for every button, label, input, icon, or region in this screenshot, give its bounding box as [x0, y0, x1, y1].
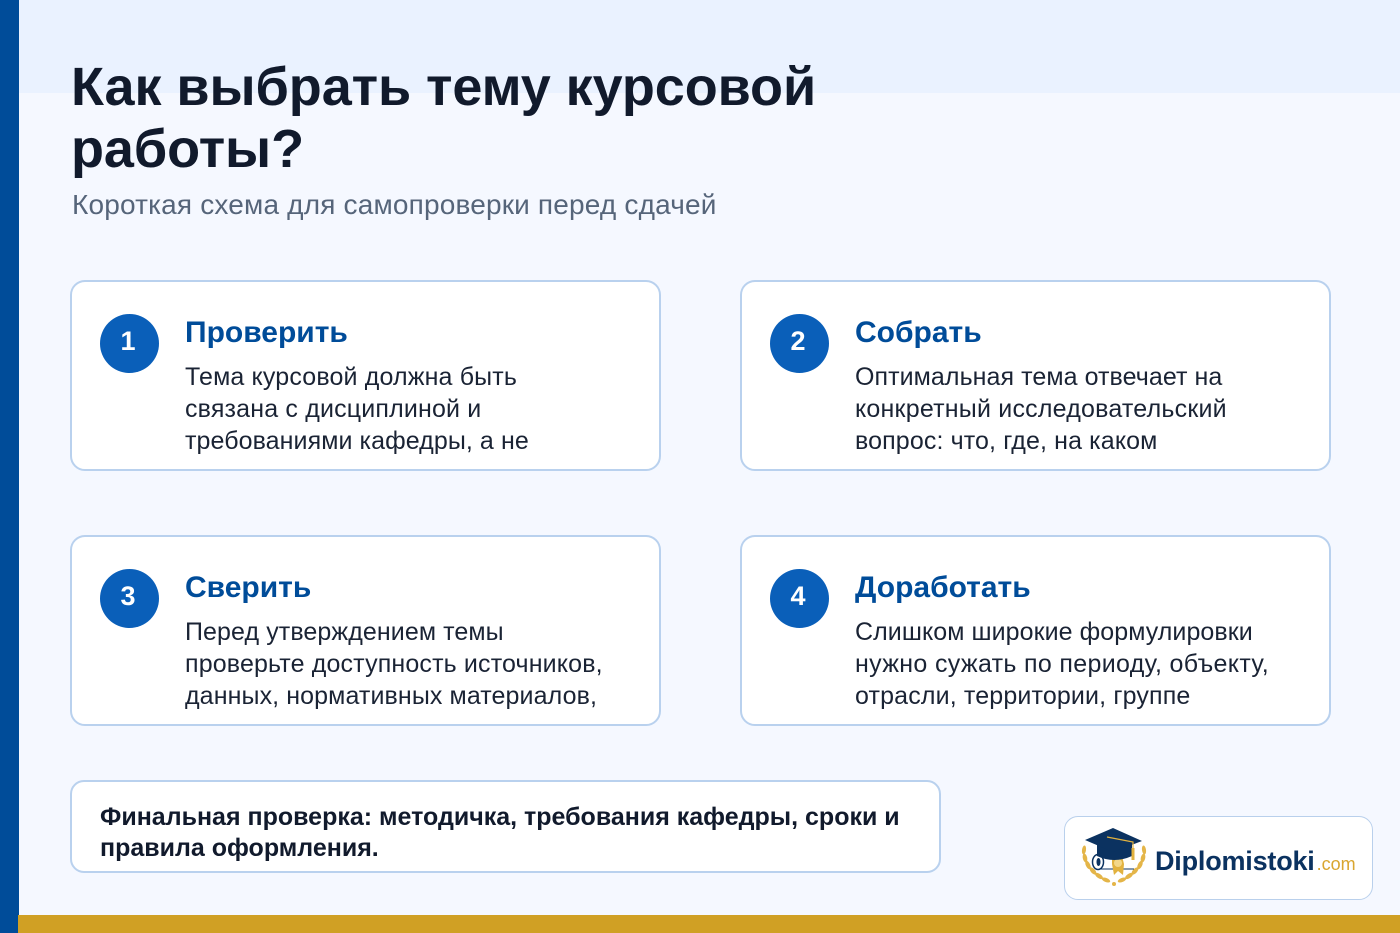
step 1 text: требованиями кафедры, а не [185, 427, 529, 455]
step 1 text: Тема курсовой должна быть [185, 363, 517, 391]
step number 4: 4 [790, 581, 806, 611]
left accent bar [0, 0, 19, 933]
step 2 text: конкретный исследовательский [855, 395, 1227, 423]
header band [19, 0, 1400, 93]
step 3 text [185, 618, 603, 710]
step 2 text [855, 363, 1227, 455]
step number 3: 3 [120, 581, 136, 611]
step number 2: 2 [790, 326, 806, 356]
step number 4 [770, 569, 829, 628]
subtitle: Короткая схема для самопроверки перед сдачей [72, 189, 717, 220]
panel: step 4 [740, 535, 1331, 726]
title: работы? [71, 119, 304, 179]
title [71, 57, 816, 179]
panel: step 3 [70, 535, 661, 726]
step 3 heading: Сверить [185, 571, 311, 604]
callout: final check [70, 780, 941, 873]
step number 1 [100, 314, 159, 373]
step 3 text: проверьте доступность источников, [185, 650, 603, 678]
logo wordmark: Diplomistoki.com [1155, 846, 1356, 876]
step number 3 [100, 569, 159, 628]
step 4 text: отрасли, территории, группе [855, 682, 1190, 710]
step 1 text: связана с дисциплиной и [185, 395, 481, 423]
panel: step 2 [740, 280, 1331, 471]
step 2 text: вопрос: что, где, на каком [855, 427, 1158, 455]
step 1 heading: Проверить [185, 316, 348, 349]
step 3 text: данных, нормативных материалов, [185, 682, 597, 710]
step 3 text: Перед утверждением темы [185, 618, 504, 646]
step 4 text: нужно сужать по периоду, объекту, [855, 650, 1269, 678]
step number 2 [770, 314, 829, 373]
step 4 text: Слишком широкие формулировки [855, 618, 1253, 646]
panel: step 1 [70, 280, 661, 471]
step number 1: 1 [120, 326, 136, 356]
step 2 text: Оптимальная тема отвечает на [855, 363, 1222, 391]
step 4 text [855, 618, 1269, 710]
step 4 heading: Доработать [855, 571, 1031, 604]
callout: final check: правила оформления. [100, 834, 379, 862]
step 1 text [185, 363, 529, 455]
bottom accent bar [18, 915, 1400, 933]
logo card [1064, 816, 1373, 900]
callout: final check: Финальная проверка: методичка, требования кафедры, сроки и [100, 803, 900, 831]
step 2 heading: Собрать [855, 316, 982, 349]
title: Как выбрать тему курсовой [71, 57, 816, 117]
icon: graduation cap with laurel wreath and diploma [1082, 828, 1146, 886]
